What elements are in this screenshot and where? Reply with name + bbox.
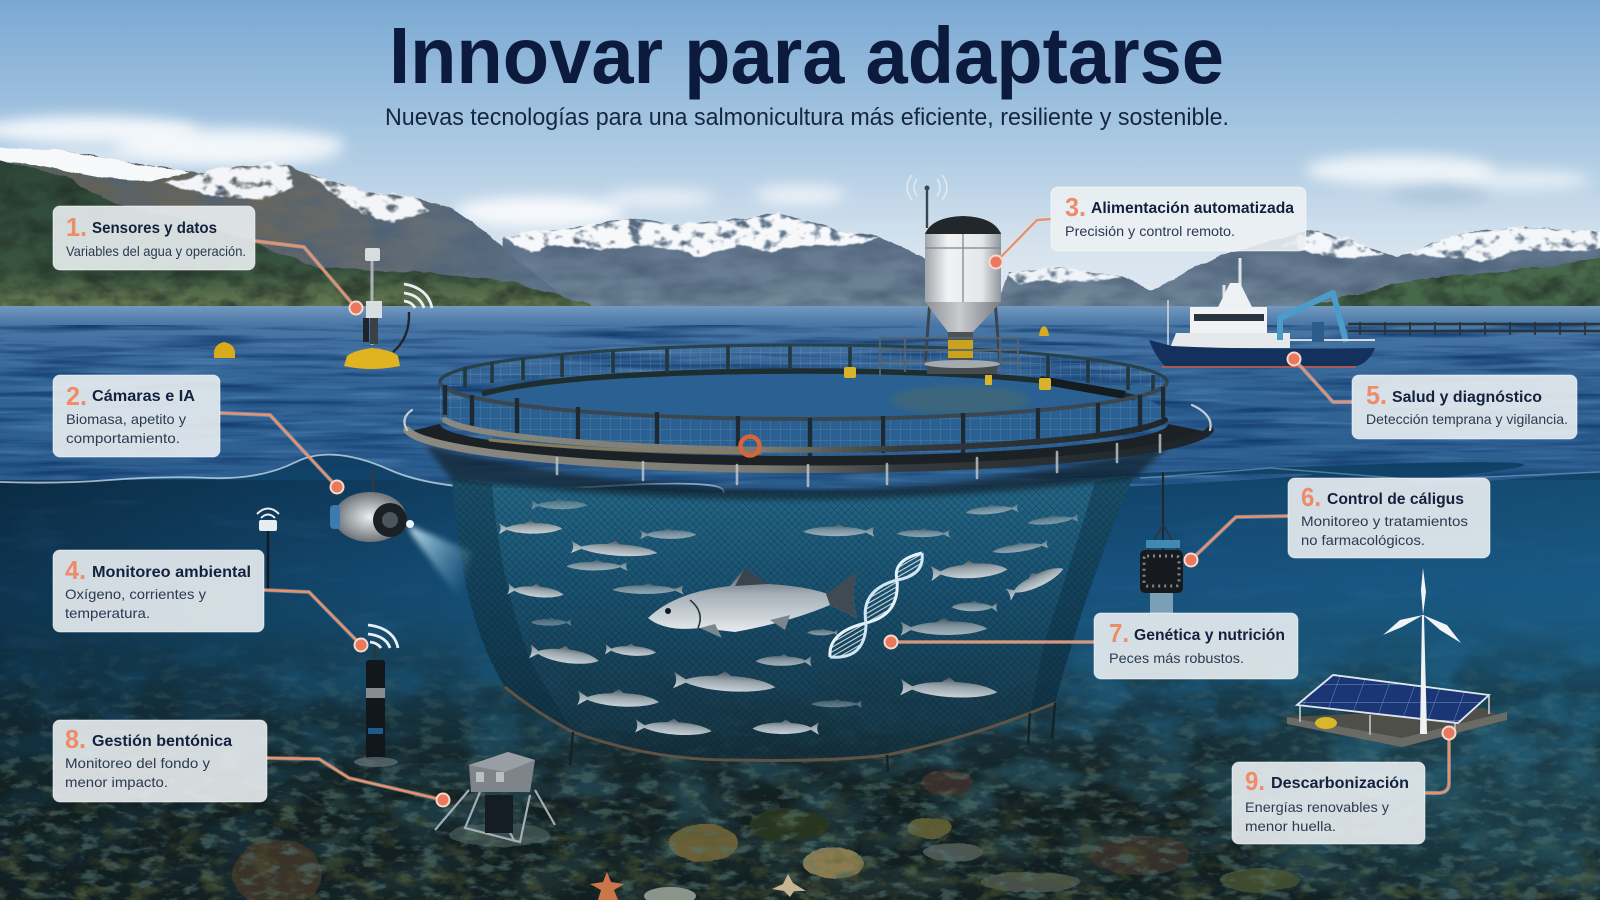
mountains: centre range (490, 213, 1015, 310)
front handrail with fence (440, 382, 1167, 456)
connector 7 (884, 636, 1094, 648)
underwater camera (330, 470, 472, 600)
net (452, 475, 1134, 772)
card 8: gestion bentonica: Monitoreo del fondo y (65, 755, 210, 771)
card 4: monitoreo ambiental: Monitoreo ambiental (92, 564, 251, 581)
connector 8 (267, 758, 450, 806)
sea surface (0, 306, 1600, 491)
connector 2 (220, 413, 344, 494)
underwater (0, 455, 1600, 900)
connector 1 (255, 241, 362, 314)
feed silo (880, 175, 1018, 378)
card 9: descarbonizacion: Descarbonización (1271, 775, 1409, 792)
card 8: gestion bentonica: 8. (65, 724, 86, 754)
far fish farm walkway (1348, 322, 1600, 335)
card 2: camaras e IA: 2. (66, 381, 87, 411)
card 7: genetica y nutricion (1094, 613, 1298, 679)
service vessel (1149, 258, 1375, 367)
mountains: left range (0, 147, 580, 310)
large salmon (648, 568, 857, 638)
card 1: sensores y datos: Variables del agua y operación. (66, 243, 246, 259)
mountains: left forested hill (0, 158, 600, 308)
card 4: monitoreo ambiental: 4. (65, 555, 86, 585)
card 9: descarbonizacion: Energías renovables y (1245, 799, 1389, 815)
life ring (740, 436, 760, 456)
card 2: camaras e IA (53, 375, 220, 457)
DNA helix (830, 553, 922, 657)
seabed corals (232, 770, 1300, 900)
small marker buoys (214, 326, 1049, 358)
wind turbine (1421, 615, 1426, 733)
card 4: monitoreo ambiental: temperatura. (65, 605, 150, 621)
card 7: genetica y nutricion: Genética y nutrición (1134, 627, 1285, 644)
net top shadow under the collar (425, 445, 1170, 500)
floating renewable platform (1287, 568, 1507, 747)
card 6: control de caligus: no farmacológicos. (1301, 532, 1425, 548)
floating collar pipes (404, 405, 1211, 486)
lower-right water tint (1230, 730, 1600, 870)
card 2: camaras e IA: Cámaras e IA (92, 388, 195, 405)
card 3: alimentacion automatizada: Precisión y control remoto. (1065, 223, 1235, 239)
connector 5 (1288, 352, 1352, 402)
card 9: descarbonizacion: 9. (1245, 766, 1265, 796)
connector 9 (1425, 726, 1456, 793)
card 5: salud y diagnostico: 5. (1366, 380, 1387, 410)
card 1: sensores y datos (53, 206, 255, 270)
connector 6 (1184, 516, 1288, 566)
seabed texture (0, 664, 1600, 900)
card 6: control de caligus (1288, 478, 1490, 558)
card 9: descarbonizacion (1232, 762, 1425, 844)
back handrail (440, 345, 1167, 398)
card 2: camaras e IA: comportamiento. (66, 430, 180, 446)
net side walls (452, 478, 573, 732)
card 3: alimentacion automatizada (1051, 187, 1306, 251)
card 8: gestion bentonica: Gestión bentónica (92, 733, 232, 750)
mountains: right forested hill (1290, 257, 1600, 310)
sea lice control device (1140, 472, 1183, 613)
seabed dark patches (0, 620, 1600, 900)
card 5: salud y diagnostico: Salud y diagnóstico (1392, 389, 1542, 406)
card 3: alimentacion automatizada: Alimentación automatizada (1091, 200, 1294, 217)
small salmon (499, 498, 1079, 738)
yellow float clamps (844, 367, 1051, 390)
salmon cage (404, 175, 1211, 772)
mountains: right range (995, 227, 1600, 310)
card 1: sensores y datos: Sensores y datos (92, 220, 217, 237)
card 9: descarbonizacion: menor huella. (1245, 818, 1336, 834)
connector 3 (990, 219, 1051, 268)
card 8: gestion bentonica: menor impacto. (65, 774, 168, 790)
card 2: camaras e IA: Biomasa, apetito y (66, 411, 186, 427)
card 7: genetica y nutricion: 7. (1109, 618, 1129, 648)
card 6: control de caligus: Monitoreo y tratamientos (1301, 513, 1468, 529)
subtitle: Nuevas tecnologías para una salmonicultura más eficiente, resiliente y sostenible. (385, 104, 1229, 131)
solar panels (1297, 675, 1489, 723)
title: Innovar para adaptarse (389, 11, 1224, 100)
card 3: alimentacion automatizada: 3. (1065, 192, 1086, 222)
card 6: control de caligus: Control de cáligus (1327, 491, 1464, 508)
sky (0, 0, 1600, 310)
card 1: sensores y datos: 1. (66, 212, 87, 242)
rock (644, 887, 696, 900)
card 8: gestion bentonica (53, 720, 267, 802)
ring interior water (442, 369, 1166, 459)
environmental monitoring probe (257, 508, 398, 767)
benthic station (435, 752, 555, 842)
card 5: salud y diagnostico (1352, 375, 1577, 439)
starfish (590, 872, 806, 900)
sensor buoy (344, 248, 432, 369)
connector 4 (264, 590, 368, 652)
card 4: monitoreo ambiental: Oxígeno, corrientes y (65, 586, 206, 602)
water line (0, 455, 724, 493)
card 4: monitoreo ambiental (53, 550, 264, 632)
card 6: control de caligus: 6. (1301, 482, 1321, 512)
card 5: salud y diagnostico: Detección temprana y vigilancia. (1366, 411, 1568, 427)
clouds (0, 116, 1590, 227)
card 7: genetica y nutricion: Peces más robustos. (1109, 650, 1244, 666)
